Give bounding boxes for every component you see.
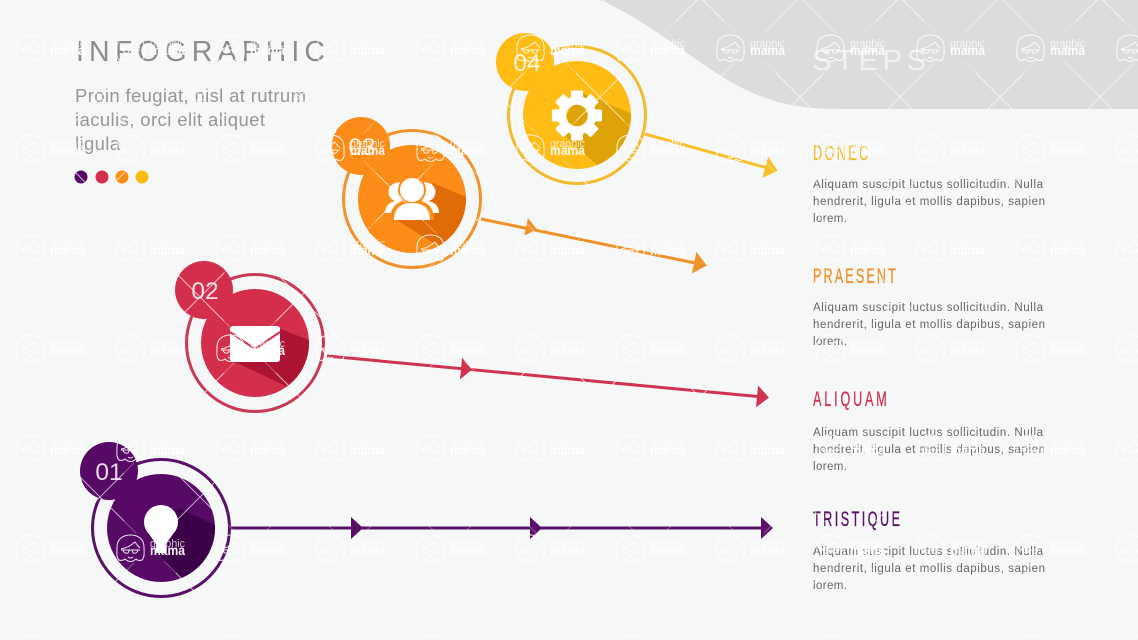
steps heading: STEPS	[812, 45, 926, 77]
step text: Donec: DONEC	[813, 141, 868, 165]
icon: gear	[552, 90, 602, 140]
step text: Tristique: TRISTIQUE	[813, 507, 900, 531]
step text: Praesent: Aliquam suscipit luctus sollicitudin. Nulla	[813, 302, 1044, 314]
arrow 01	[231, 517, 773, 539]
step text: Aliquam: Aliquam suscipit luctus sollicitudin. Nulla	[813, 427, 1044, 439]
step text: Praesent: lorem.	[813, 336, 847, 348]
icon: envelope	[230, 326, 280, 362]
step text: Tristique: hendrerit, ligula et mollis dapibus, sapien	[813, 563, 1045, 575]
step text: Aliquam: lorem.	[813, 461, 847, 473]
step text: Tristique: Aliquam suscipit luctus sollicitudin. Nulla	[813, 546, 1044, 558]
step 03 node	[332, 117, 482, 269]
icon: light bulb	[144, 505, 178, 553]
step 02 node	[175, 261, 325, 413]
arrow 02	[327, 356, 770, 409]
step text: Praesent	[813, 264, 1045, 348]
intro text: Proin feugiat, nisl at rutrum	[75, 85, 306, 106]
colour dots	[74, 170, 148, 184]
step text: Aliquam: hendrerit, ligula et mollis dapibus, sapien	[813, 444, 1045, 456]
step text: Donec	[813, 141, 1045, 225]
number 04: 04	[513, 50, 541, 77]
step text: Aliquam: ALIQUAM	[813, 387, 887, 411]
step text: Praesent: PRAESENT	[813, 264, 896, 288]
arrow 04	[645, 134, 781, 182]
icon: people	[385, 176, 439, 220]
number 02: 02	[191, 278, 219, 305]
step text: Tristique: lorem.	[813, 580, 847, 592]
step 01 node	[80, 442, 231, 598]
number 03: 03	[348, 134, 376, 161]
step text: Donec: hendrerit, ligula et mollis dapibus, sapien	[813, 196, 1045, 208]
step text: Praesent: hendrerit, ligula et mollis dapibus, sapien	[813, 319, 1045, 331]
intro text	[75, 85, 306, 154]
intro text: ligula	[75, 133, 121, 154]
title: INFOGRAPHIC	[76, 36, 325, 68]
step text: Donec: Aliquam suscipit luctus sollicitudin. Nulla	[813, 179, 1044, 191]
step text: Tristique	[813, 507, 1045, 592]
step text: Donec: lorem.	[813, 213, 847, 225]
step 04 node	[496, 33, 647, 185]
arrow 03	[481, 218, 709, 276]
step text: Aliquam	[813, 387, 1045, 473]
number 01: 01	[95, 459, 123, 486]
intro text: iaculis, orci elit aliquet	[75, 109, 265, 130]
grey header wave	[600, 0, 1138, 109]
